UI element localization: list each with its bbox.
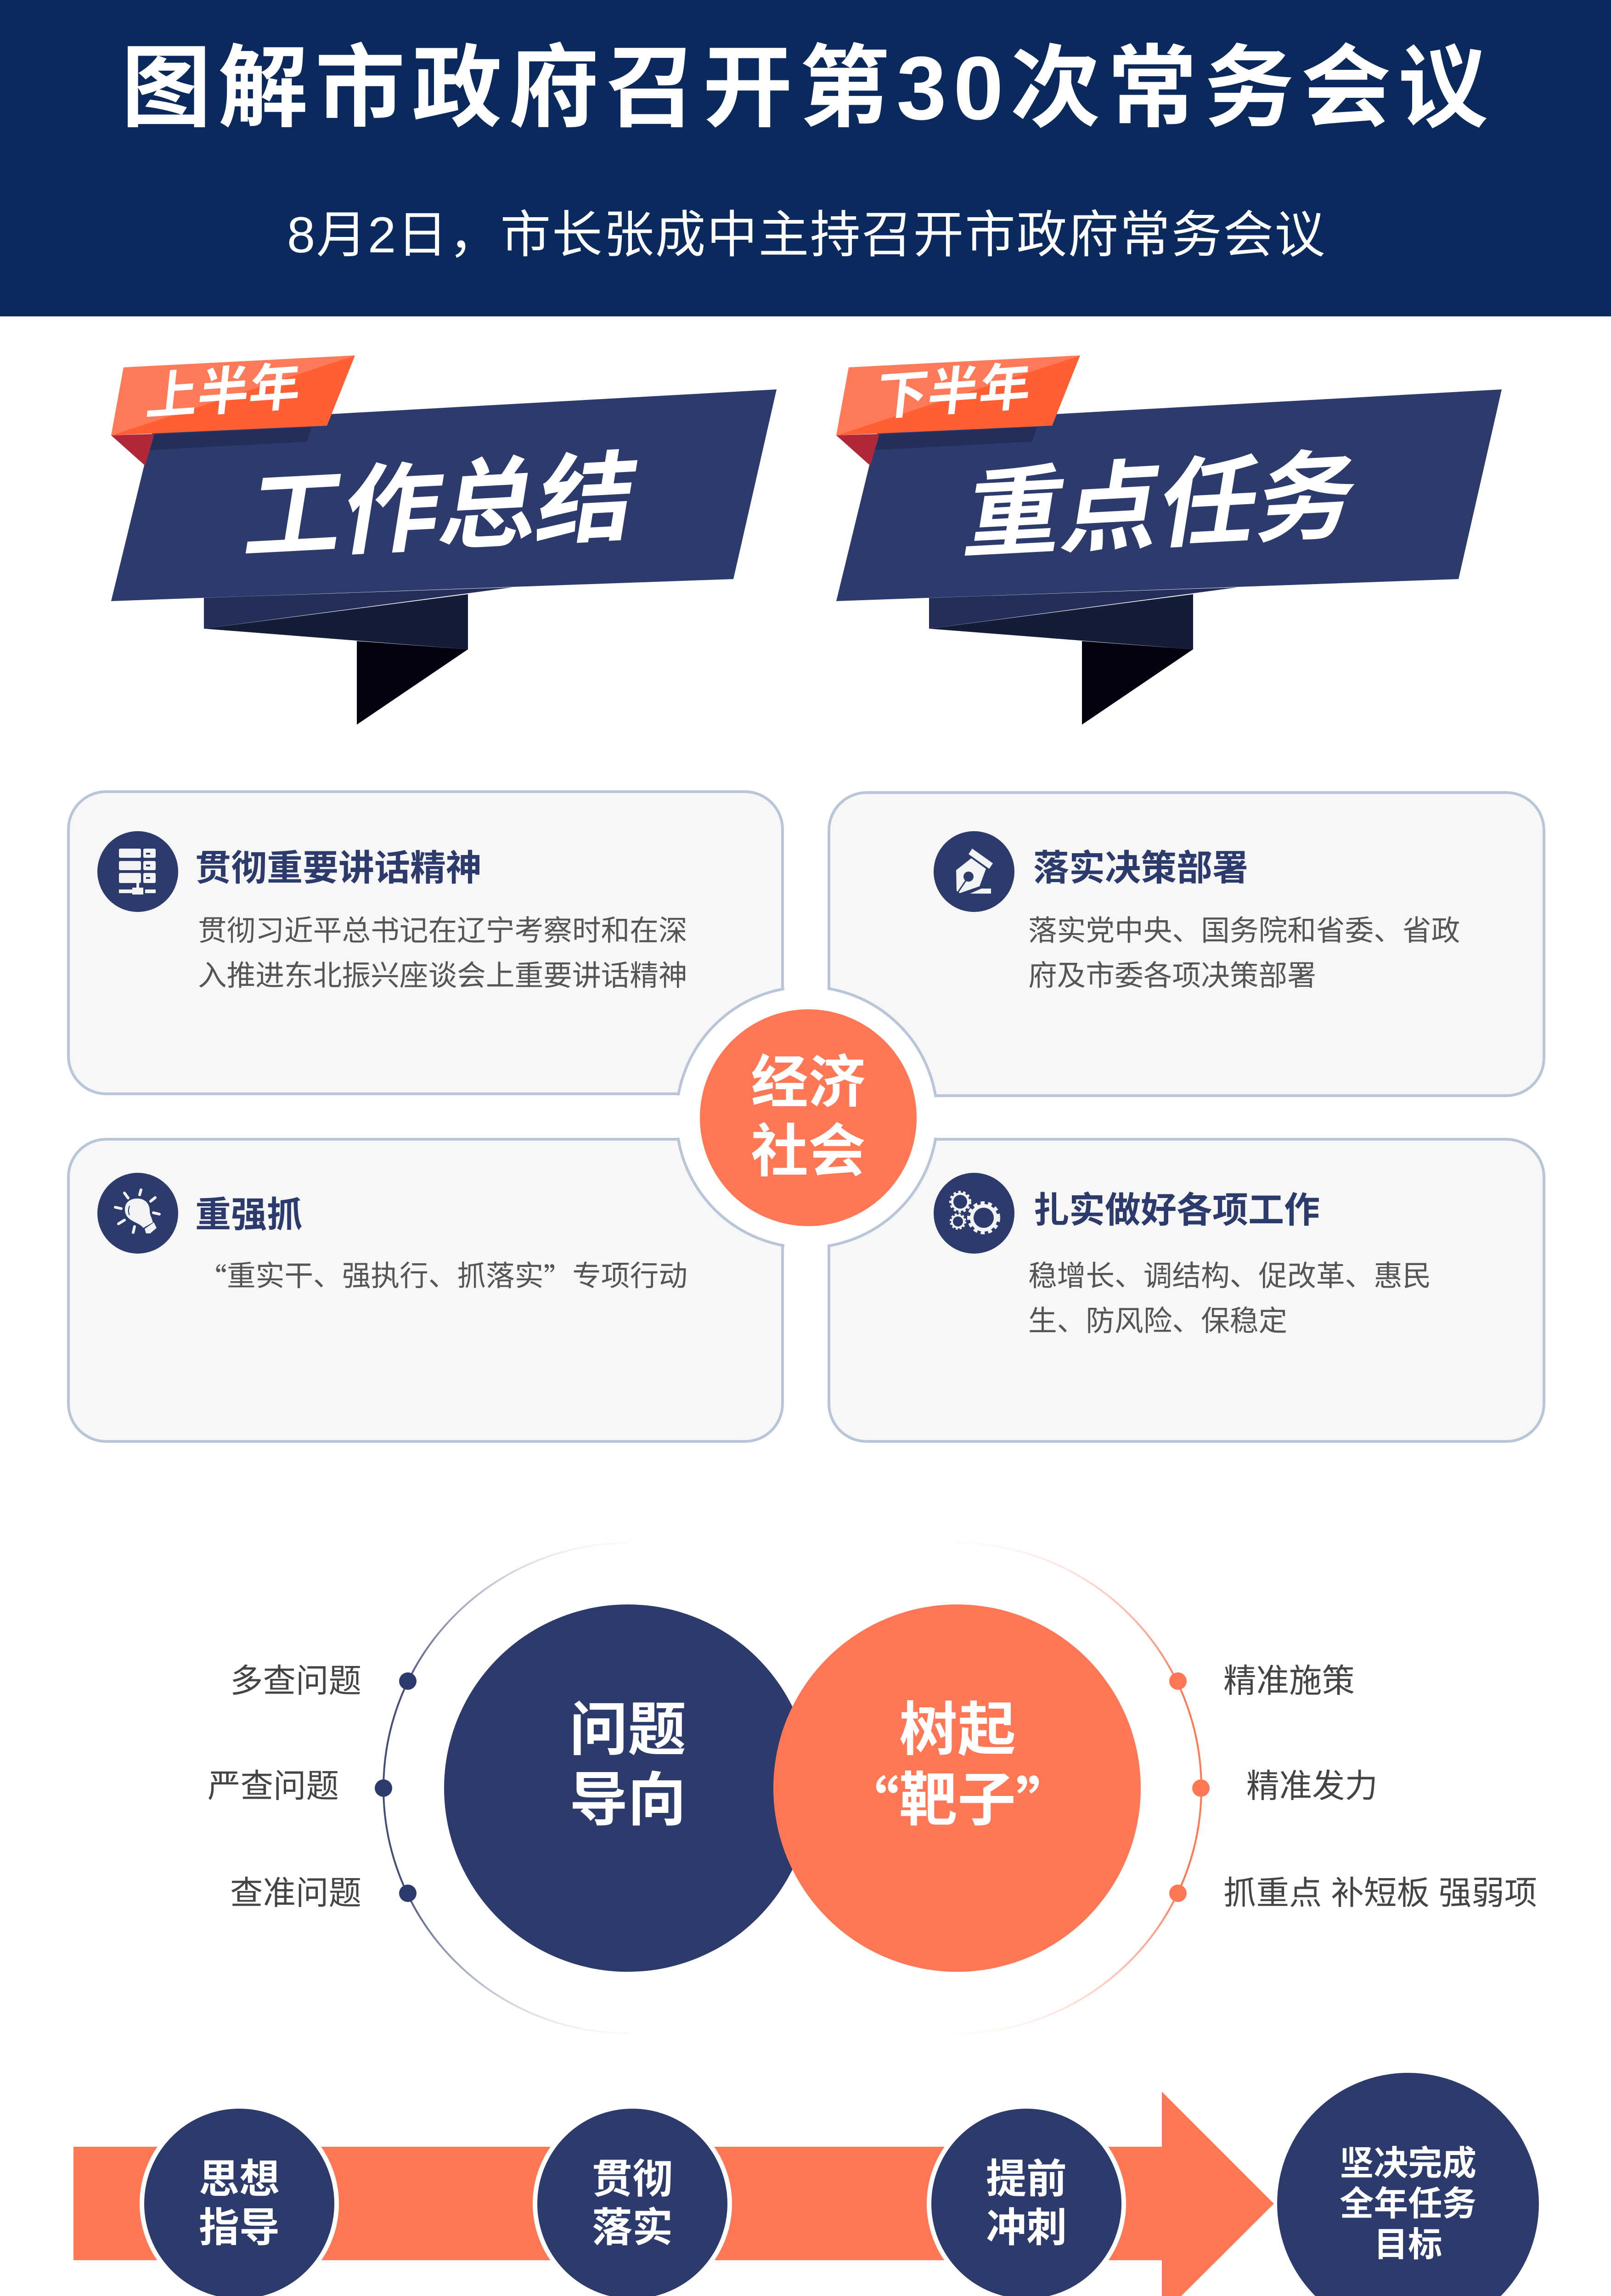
- circle: 问题导向: 导向: [569, 1767, 686, 1833]
- ribbon: 下半年 重点任务: [836, 355, 1502, 725]
- step: 思想指导: 思想: [199, 2156, 280, 2201]
- heading: 重点任务: 重点任务: [958, 441, 1364, 571]
- panel: 重强抓: [68, 1139, 783, 1441]
- arrow: [73, 2092, 1274, 2296]
- panel text: [1028, 1260, 1431, 1337]
- step: 提前冲刺: 提前: [986, 2156, 1067, 2201]
- icon: light bulb: [97, 1173, 178, 1254]
- title: 图解市政府召开第30次常务会议: [121, 38, 1495, 139]
- panel text: 府及市委各项决策部署: [1028, 960, 1316, 992]
- panel title: 贯彻重要讲话精神: [195, 848, 482, 888]
- circle: 树起靶子: 树起: [899, 1697, 1016, 1762]
- goal circle: 坚决完成: [1340, 2144, 1476, 2182]
- icon: fountain pen: [934, 831, 1014, 912]
- panel text: 生、防风险、保稳定: [1028, 1305, 1287, 1337]
- panel text: 贯彻习近平总书记在辽宁考察时和在深: [198, 915, 687, 947]
- section: 问题导向 and 树起靶子: [208, 1543, 1537, 2033]
- panel text: 稳增长、调结构、促改革、惠民: [1028, 1260, 1431, 1292]
- panel text: [198, 915, 687, 992]
- panel title: 扎实做好各项工作: [1033, 1190, 1320, 1230]
- panel text: “重实干、强执行、抓落实”专项行动: [198, 1255, 687, 1297]
- label: 下半年: 下半年: [874, 357, 1034, 426]
- section: arrow process: [73, 2073, 1539, 2296]
- right dots and labels: 精准施策: [1223, 1663, 1355, 1699]
- panel: 贯彻重要讲话精神: [68, 792, 783, 1094]
- subtitle: 8月2日，市长张成中主持召开市政府常务会议: [287, 207, 1326, 264]
- step: 思想指导: [142, 2106, 337, 2296]
- panel: 扎实做好各项工作: [829, 1139, 1544, 1441]
- left dots and labels: 查准问题: [230, 1875, 361, 1912]
- center hub: 经济社会: [661, 964, 951, 1272]
- panel text: [1028, 915, 1460, 992]
- center hub: 经济社会: 经济: [751, 1051, 866, 1115]
- panel title: 重强抓: [195, 1194, 303, 1235]
- left dots and labels: [208, 1663, 417, 1912]
- right arc: [956, 1543, 1201, 2033]
- left arc: [383, 1543, 629, 2033]
- label: 上半年: 上半年: [144, 357, 304, 426]
- right dots and labels: 抓重点 补短板 强弱项: [1223, 1875, 1537, 1912]
- panel title: 落实决策部署: [1033, 848, 1248, 888]
- icon: gears: [934, 1173, 1014, 1254]
- step: 提前冲刺: 冲刺: [986, 2205, 1067, 2250]
- step: 贯彻落实: 落实: [592, 2205, 673, 2250]
- left dots and labels: 多查问题: [230, 1663, 361, 1699]
- right dots and labels: [1169, 1663, 1537, 1912]
- panel text: 落实党中央、国务院和省委、省政: [1028, 915, 1460, 947]
- left dots and labels: 严查问题: [208, 1768, 339, 1805]
- circle: 树起靶子: [773, 1604, 1141, 1972]
- circle: 树起靶子: “靶子”: [841, 1758, 1074, 1842]
- header: [0, 0, 1611, 316]
- ribbon: 上半年 工作总结: [111, 355, 777, 725]
- step: 提前冲刺: [929, 2106, 1124, 2296]
- goal circle: [1277, 2073, 1539, 2296]
- step: 思想指导: 指导: [199, 2205, 280, 2250]
- circle: 问题导向: [444, 1604, 811, 1972]
- goal circle: 全年任务: [1340, 2185, 1476, 2223]
- panel: 落实决策部署: [829, 793, 1544, 1096]
- goal circle: 目标: [1374, 2225, 1442, 2264]
- step: 贯彻落实: [535, 2106, 730, 2296]
- heading: 工作总结: 工作总结: [238, 443, 644, 573]
- step: 贯彻落实: 贯彻: [592, 2156, 673, 2201]
- right dots and labels: 精准发力: [1246, 1768, 1378, 1805]
- icon: server: [97, 831, 178, 912]
- section: four panels around 经济社会: [68, 792, 1544, 1441]
- center hub: 经济社会: 社会: [751, 1120, 866, 1184]
- circle: 问题导向: 问题: [569, 1697, 686, 1762]
- panel text: 入推进东北振兴座谈会上重要讲话精神: [198, 960, 687, 992]
